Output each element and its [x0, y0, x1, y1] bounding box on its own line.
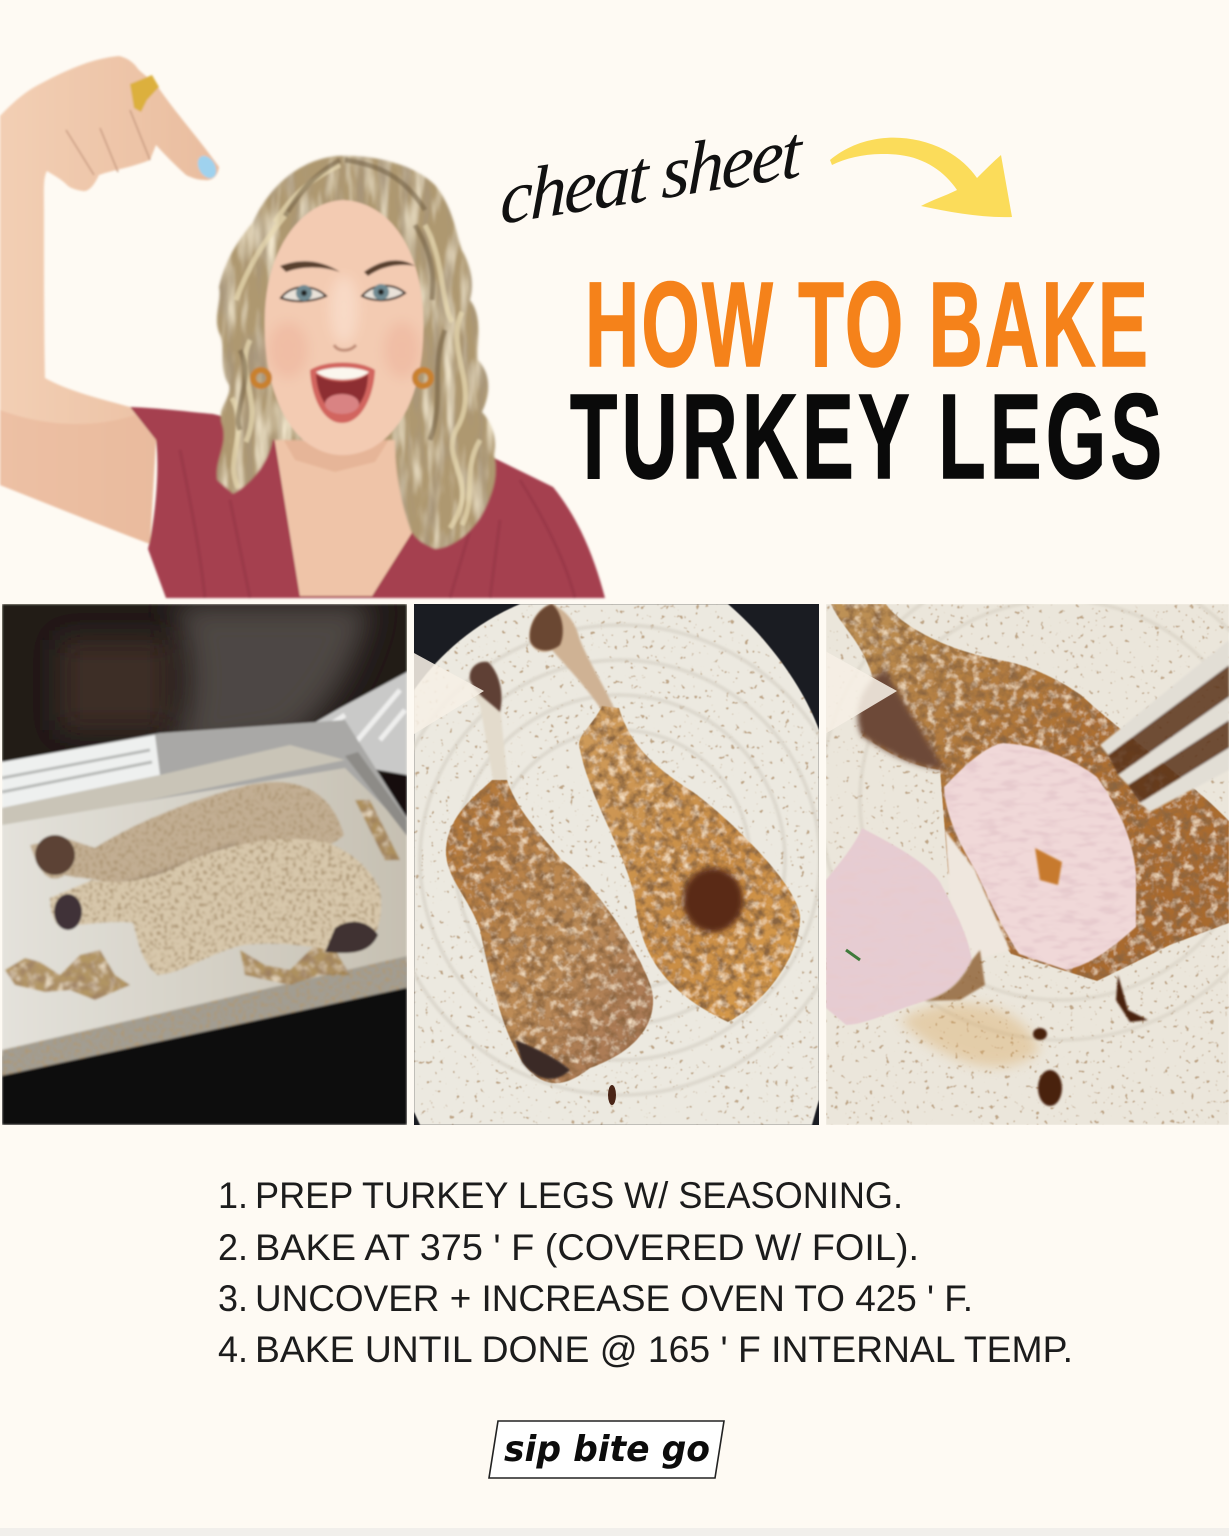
- fork tines: [1100, 640, 1229, 812]
- plate ridges: [826, 604, 1229, 1042]
- arrow: yellow swoosh: [830, 138, 1012, 217]
- title line 2: TURKEY LEGS: [570, 368, 1162, 504]
- speckled plate: [414, 604, 819, 1125]
- turkey leg: [831, 604, 1229, 981]
- neck and chest: [273, 429, 425, 596]
- tray surface: [2, 768, 407, 1056]
- face: [265, 200, 423, 455]
- cut slice: [826, 828, 972, 1025]
- step 3: UNCOVER + INCREASE OVEN TO 425 ' F.: [255, 1278, 973, 1319]
- logo: sip bite go: [489, 1421, 724, 1478]
- play triangle overlay: [414, 653, 484, 734]
- front turkey leg: [446, 662, 653, 1105]
- shadow between legs: [131, 842, 236, 880]
- foil: [315, 670, 407, 778]
- step 1: 1.: [218, 1175, 248, 1216]
- title: [570, 258, 1162, 504]
- nose: [334, 345, 356, 350]
- drippings: [900, 1003, 1040, 1067]
- play triangle overlay: [825, 651, 897, 734]
- earrings: [253, 370, 269, 386]
- back turkey leg: [30, 782, 344, 894]
- grease stains: [5, 800, 400, 1000]
- ring: [130, 75, 159, 112]
- back turkey leg: [530, 604, 800, 1022]
- eyes and brows: [280, 260, 415, 276]
- bottom strip: [0, 1528, 1229, 1536]
- text block: numbered steps: [218, 1175, 1073, 1370]
- step 3: 3.: [218, 1278, 248, 1319]
- logo: sip bite go: sip bite go: [504, 1429, 710, 1470]
- white fibres between slices: [945, 830, 1010, 960]
- steam: [165, 604, 380, 731]
- tray back with window reflection: [26, 719, 407, 820]
- pink cut meat: [944, 743, 1136, 970]
- oven background: [2, 604, 407, 774]
- step 1: PREP TURKEY LEGS W/ SEASONING.: [255, 1175, 903, 1216]
- panel: photo of sliced turkey leg with fork: [820, 560, 1229, 1125]
- panel: photo of turkey legs on foil tray: [2, 604, 407, 1125]
- title line 1: HOW TO BAKE: [585, 258, 1148, 392]
- panel: photo of baked turkey legs on speckled plate: [414, 604, 819, 1125]
- step 2: BAKE AT 375 ' F (COVERED W/ FOIL).: [255, 1227, 919, 1268]
- photo: host pointing down: [0, 56, 605, 598]
- open mouth: [310, 362, 375, 423]
- shirt: [130, 407, 605, 598]
- hair: [217, 156, 496, 549]
- step 4: BAKE UNTIL DONE @ 165 ' F INTERNAL TEMP.: [255, 1329, 1073, 1370]
- step 2: 2.: [218, 1227, 248, 1268]
- blue nail: [194, 153, 220, 181]
- step 4: 4.: [218, 1329, 248, 1370]
- tray rim: [2, 956, 407, 1076]
- script note: cheat sheet: cheat sheet: [500, 110, 805, 241]
- arm and pointing hand: [0, 56, 219, 544]
- front turkey leg: [50, 839, 381, 975]
